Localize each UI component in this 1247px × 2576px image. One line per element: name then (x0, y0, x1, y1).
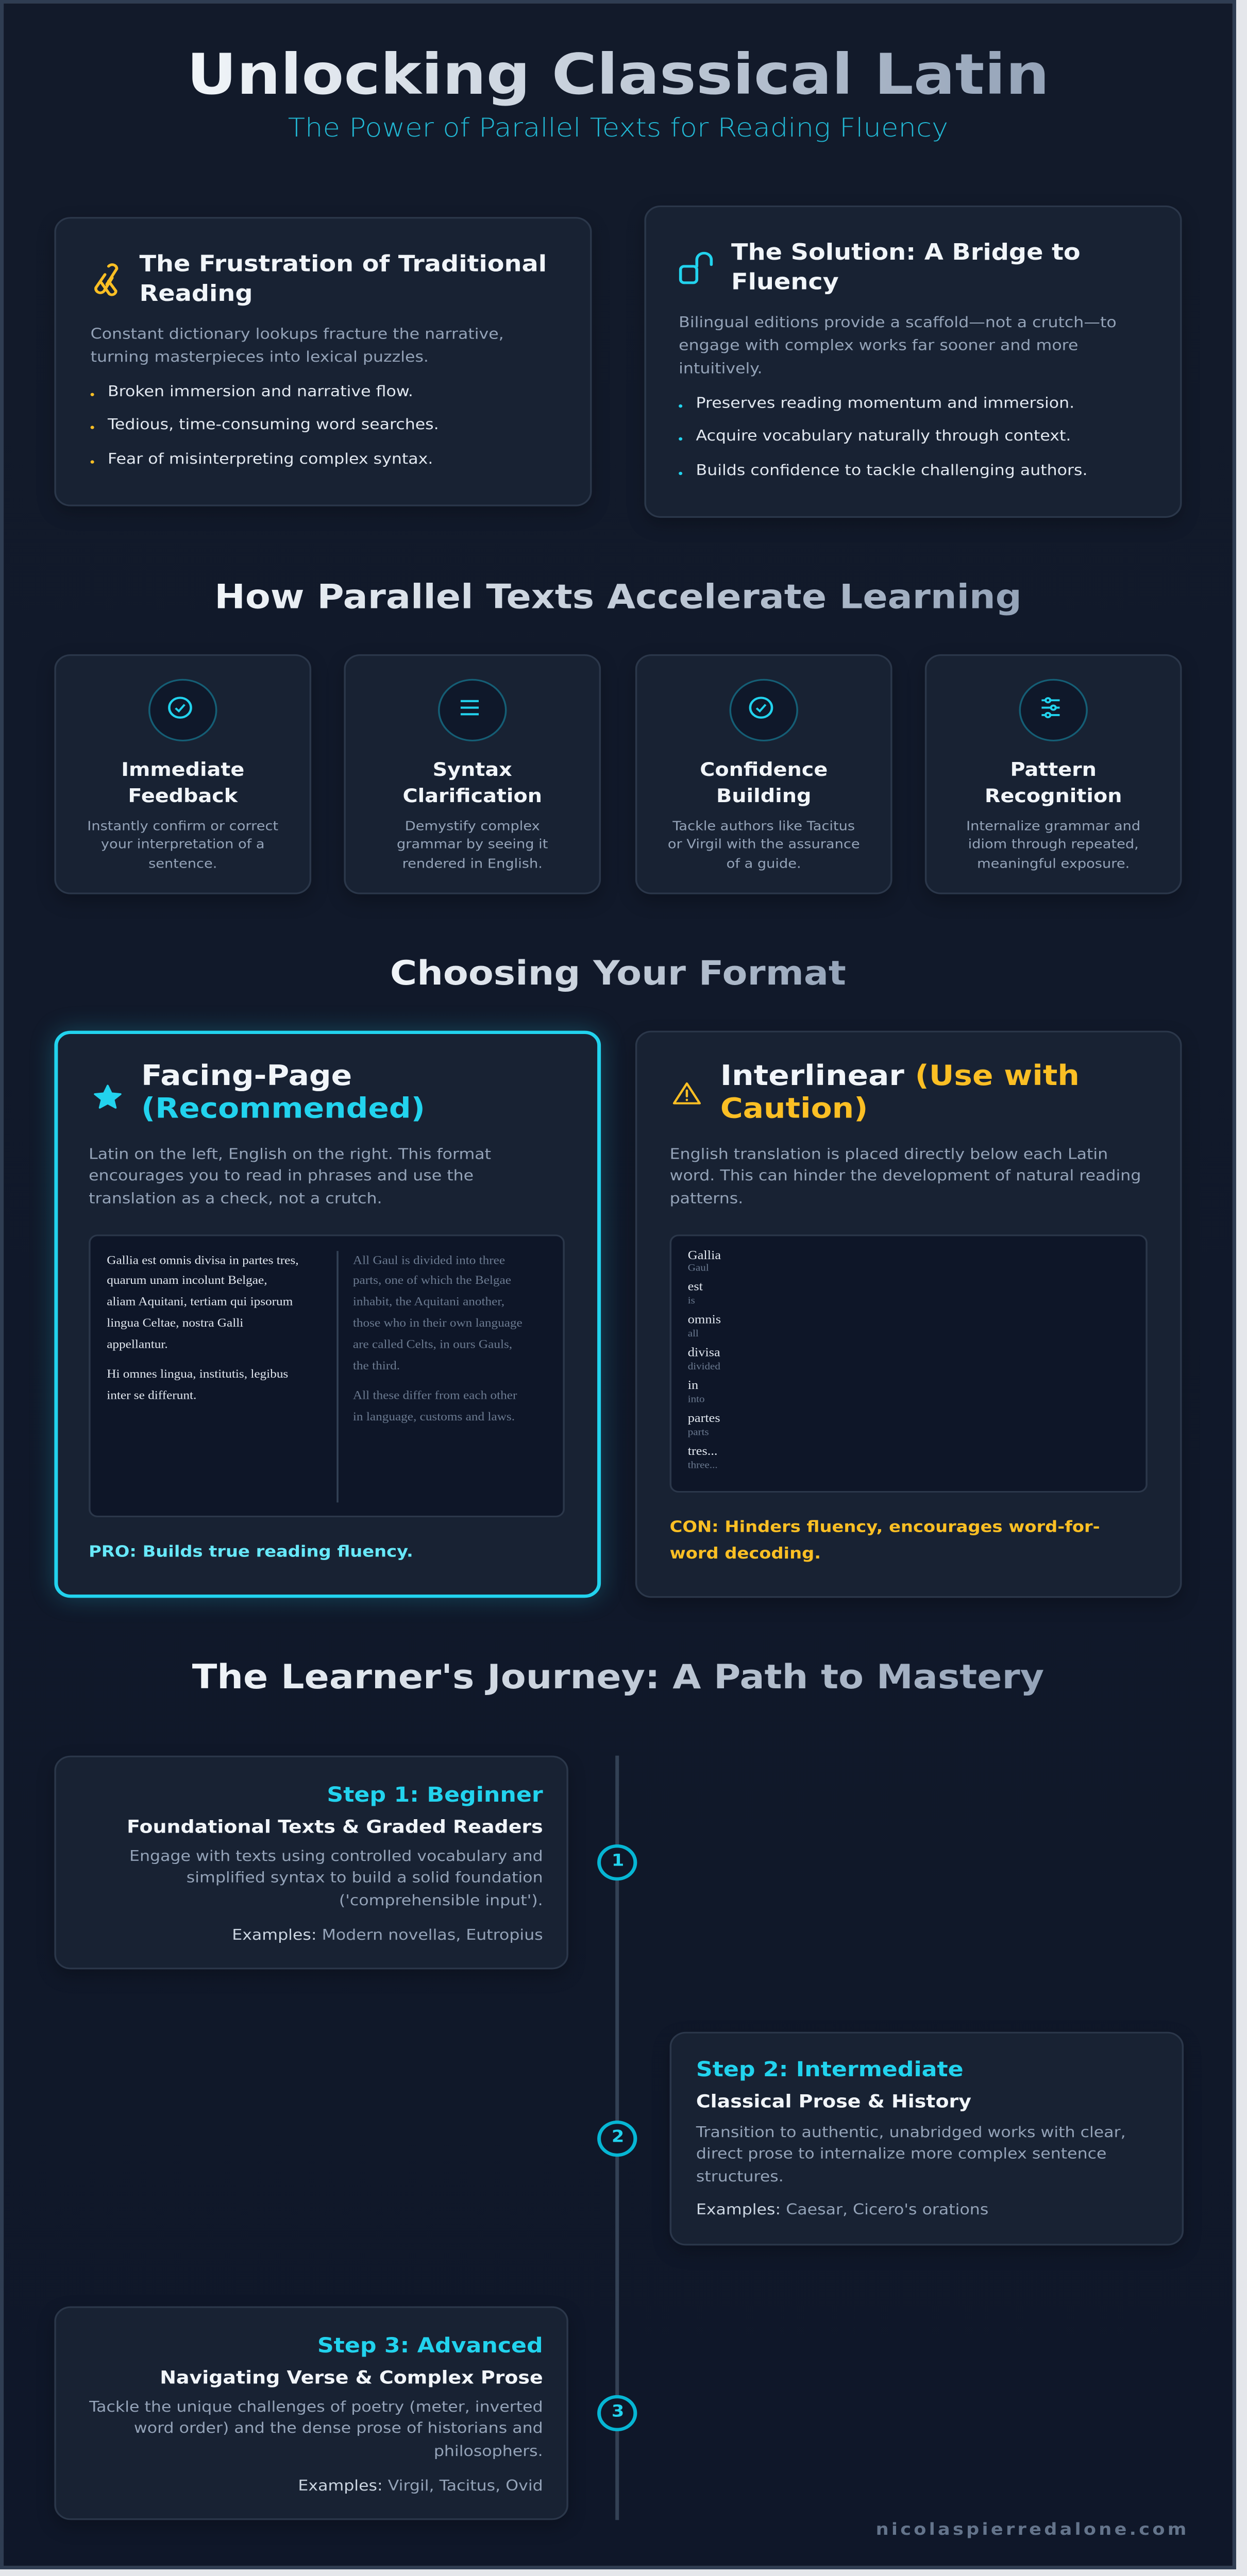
list: frustration bullets: Fear of misinterpreting complex syntax. (108, 451, 433, 468)
footer: nicolaspierredalone.com (876, 2522, 1189, 2540)
panel: step 1: Step 1: Beginner (327, 1781, 543, 1806)
panel: step 1: Foundational Texts & Graded Readers (127, 1816, 543, 1837)
text: frustration description (91, 327, 504, 367)
sample: facing-page text: quarum unam incolunt Belgae, (107, 1275, 267, 1288)
sample: facing-page text: those who in their own language (353, 1317, 523, 1330)
heading: frustration (94, 251, 547, 308)
panel: pattern recognition: Recognition (985, 785, 1122, 806)
text: solution description: intuitively. (679, 362, 763, 378)
sample: interlinear text: partes (688, 1410, 720, 1425)
panel: interlinear (635, 1031, 1182, 1598)
heading: solution: Fluency (731, 269, 839, 296)
sample: facing-page text: in language, customs and laws. (353, 1410, 515, 1423)
text: solution description: Bilingual editions provide a scaffold—not a crutch—to (679, 316, 1117, 332)
list: frustration bullets: Broken immersion and narrative flow. (108, 384, 413, 400)
marker: step 1 (598, 1845, 638, 1881)
panel: step 1 (54, 1756, 568, 1969)
panel: syntax clarification: rendered in English. (402, 856, 543, 870)
sample: facing-page text: All these differ from each other (353, 1389, 517, 1402)
panel: step 2: Examples: Caesar, Cicero's orations (696, 2204, 988, 2220)
panel: facing-page (54, 1031, 601, 1598)
callout: con (670, 1519, 1100, 1563)
subtitle: The Power of Parallel Texts for Reading Fluency (288, 113, 948, 143)
sample: interlinear text: parts (688, 1428, 709, 1438)
icon: star (94, 1084, 122, 1109)
text: interlinear description (670, 1147, 1141, 1208)
panel: step 2 (669, 2031, 1183, 2245)
sample: interlinear text: into (688, 1396, 705, 1405)
heading: facing-page (141, 1060, 425, 1125)
text: facing-page description: encourages you to read in phrases and use the (89, 1169, 474, 1185)
panel: confidence building: of a guide. (727, 856, 801, 870)
sample: facing-page text: the third. (353, 1360, 400, 1372)
panel: confidence building: Tackle authors like Tacitus (672, 818, 855, 833)
panel: pattern recognition: idiom through repeated, (968, 837, 1139, 852)
panel: step 3: Tackle the unique challenges of poetry (meter, inverted (89, 2400, 543, 2416)
sample: interlinear text: omnis (688, 1312, 721, 1327)
panel: confidence building: Building (716, 785, 811, 806)
text: frustration description: Constant dictionary lookups fracture the narrative, (91, 327, 504, 344)
icon: lines (438, 679, 507, 741)
heading: facing-page: (Recommended) (141, 1093, 425, 1125)
marker: step 3 (598, 2395, 638, 2431)
callout: con: CON: Hinders fluency, encourages word-for- (670, 1519, 1100, 1537)
text: interlinear description: English translation is placed directly below each Latin (670, 1147, 1108, 1163)
panel: step 3: philosophers. (434, 2444, 543, 2461)
icon: unlock (679, 251, 713, 284)
sample: facing-page text: lingua Celtae, nostra Galli (107, 1317, 243, 1330)
sample: interlinear text: est (688, 1280, 703, 1294)
sample: facing-page text: Hi omnes lingua, institutis, legibus (107, 1368, 288, 1381)
panel: immediate feedback: your interpretation of a (101, 837, 265, 852)
text: interlinear description: word. This can hinder the development of natural reading (670, 1169, 1141, 1185)
sample: facing-page text: are called Celts, in ours Gauls, (353, 1338, 512, 1351)
sample: facing-page text: inhabit, the Aquitani another, (353, 1296, 504, 1309)
list: solution bullets: Acquire vocabulary naturally through context. (696, 429, 1071, 446)
list: frustration bullets (91, 384, 439, 468)
panel: step 1: Engage with texts using controlled vocabulary and (129, 1849, 543, 1866)
heading: facing-page: Facing-Page (141, 1060, 352, 1093)
panel: step 3: word order) and the dense prose of historians and (134, 2422, 543, 2438)
panel: step 2: Step 2: Intermediate (696, 2057, 964, 2082)
sample: interlinear text: divided (688, 1363, 720, 1372)
panel: immediate feedback: Feedback (128, 785, 238, 806)
panel: step 2: Transition to authentic, unabridged works with clear, (696, 2125, 1126, 2141)
panel: step 2: direct prose to internalize more complex sentence (696, 2147, 1107, 2163)
list: solution bullets: Preserves reading momentum and immersion. (696, 395, 1074, 412)
panel: syntax clarification (344, 654, 601, 894)
icon: check circle (148, 679, 217, 741)
sample: facing-page text: appellantur. (107, 1338, 168, 1351)
panel: confidence building (635, 654, 892, 894)
marker: step 2: 2 (612, 2129, 624, 2147)
heading: learner's journey: The Learner's Journey: A Path to Mastery (192, 1657, 1044, 1697)
panel: syntax clarification: grammar by seeing it (397, 837, 548, 852)
sample: interlinear text (670, 1234, 1148, 1492)
sample: facing-page text: parts, one of which the Belgae (353, 1275, 511, 1288)
marker: step 1: 1 (612, 1853, 624, 1871)
panel: frustration (54, 217, 592, 506)
sample: interlinear text: all (688, 1330, 699, 1340)
text: interlinear description: patterns. (670, 1191, 743, 1208)
sample: facing-page text: Gallia est omnis divisa in partes tres, (107, 1253, 299, 1266)
panel: step 3: Examples: Virgil, Tacitus, Ovid (298, 2478, 543, 2495)
marker: step 2 (598, 2121, 638, 2157)
icon: warning (673, 1082, 701, 1105)
panel: step 3 (54, 2307, 568, 2520)
text: facing-page description (89, 1147, 491, 1208)
sample: interlinear text: in (688, 1378, 698, 1393)
heading: interlinear (720, 1060, 1080, 1125)
panel: confidence building: Confidence (700, 759, 828, 780)
heading: interlinear: Caution) (720, 1093, 868, 1125)
text: frustration description: turning masterpieces into lexical puzzles. (91, 350, 429, 367)
heading: how parallel texts accelerate learning: How Parallel Texts Accelerate Learning (214, 577, 1022, 617)
panel: pattern recognition: meaningful exposure. (977, 856, 1130, 870)
sample: interlinear text: three... (688, 1461, 718, 1471)
panel: step 1: ('comprehensible input'). (339, 1893, 543, 1910)
text: facing-page description: translation as a check, not a crutch. (89, 1191, 382, 1208)
panel: immediate feedback: sentence. (148, 856, 217, 870)
sample: facing-page text: All Gaul is divided into three (353, 1253, 505, 1266)
panel: immediate feedback: Immediate (121, 759, 244, 780)
panel: step 3: Step 3: Advanced (317, 2332, 543, 2357)
sample: interlinear text: Gallia (688, 1247, 721, 1262)
panel: step 1: Examples: Modern novellas, Eutropius (232, 1928, 543, 1944)
panel: pattern recognition: Internalize grammar and (966, 818, 1140, 833)
panel: solution (644, 206, 1182, 518)
panel: step 3: Navigating Verse & Complex Prose (160, 2366, 543, 2388)
icon: paperclip (94, 263, 119, 296)
panel: confidence building: or Virgil with the assurance (668, 837, 860, 852)
callout: pro: PRO: Builds true reading fluency. (89, 1544, 413, 1562)
panel: syntax clarification: Demystify complex (405, 818, 540, 833)
sample: facing-page text: inter se differunt. (107, 1389, 196, 1402)
heading: solution: The Solution: A Bridge to (731, 240, 1081, 266)
sample: interlinear text: is (688, 1297, 695, 1308)
text: solution description (679, 316, 1117, 378)
icon: sliders (1019, 679, 1088, 741)
panel: immediate feedback: Instantly confirm or correct (87, 818, 278, 833)
marker: step 3: 3 (612, 2403, 624, 2421)
sample: facing-page text (89, 1234, 565, 1517)
sample: interlinear text: Gaul (688, 1265, 709, 1275)
heading: interlinear: Interlinear (Use with (720, 1060, 1080, 1093)
panel: syntax clarification: Clarification (403, 785, 542, 806)
sample: interlinear text: tres... (688, 1443, 718, 1458)
list: solution bullets (679, 395, 1088, 479)
timeline line (616, 1756, 620, 2520)
panel: immediate feedback (54, 654, 311, 894)
heading: choosing your format: Choosing Your Format (390, 954, 846, 993)
panel: pattern recognition: Pattern (1010, 759, 1097, 780)
panel: syntax clarification: Syntax (433, 759, 512, 780)
heading: frustration: The Frustration of Traditional (139, 251, 547, 278)
text: solution description: engage with complex works far sooner and more (679, 338, 1078, 355)
icon: check circle (729, 679, 798, 741)
heading: solution (679, 240, 1081, 296)
callout: con: word decoding. (670, 1545, 821, 1563)
list: frustration bullets: Tedious, time-consuming word searches. (108, 417, 439, 434)
list: solution bullets: Builds confidence to tackle challenging authors. (696, 463, 1088, 479)
text: facing-page description: Latin on the left, English on the right. This format (89, 1147, 491, 1163)
title: Unlocking Classical Latin (187, 43, 1050, 109)
panel: pattern recognition (925, 654, 1182, 894)
heading: frustration: Reading (139, 281, 253, 308)
panel: step 2: Classical Prose & History (696, 2092, 971, 2113)
panel: step 1: simplified syntax to build a solid foundation (187, 1871, 543, 1888)
sample: facing-page text: aliam Aquitani, tertiam qui ipsorum (107, 1296, 293, 1309)
panel: step 2: structures. (696, 2170, 784, 2185)
sample: interlinear text: divisa (688, 1345, 720, 1360)
